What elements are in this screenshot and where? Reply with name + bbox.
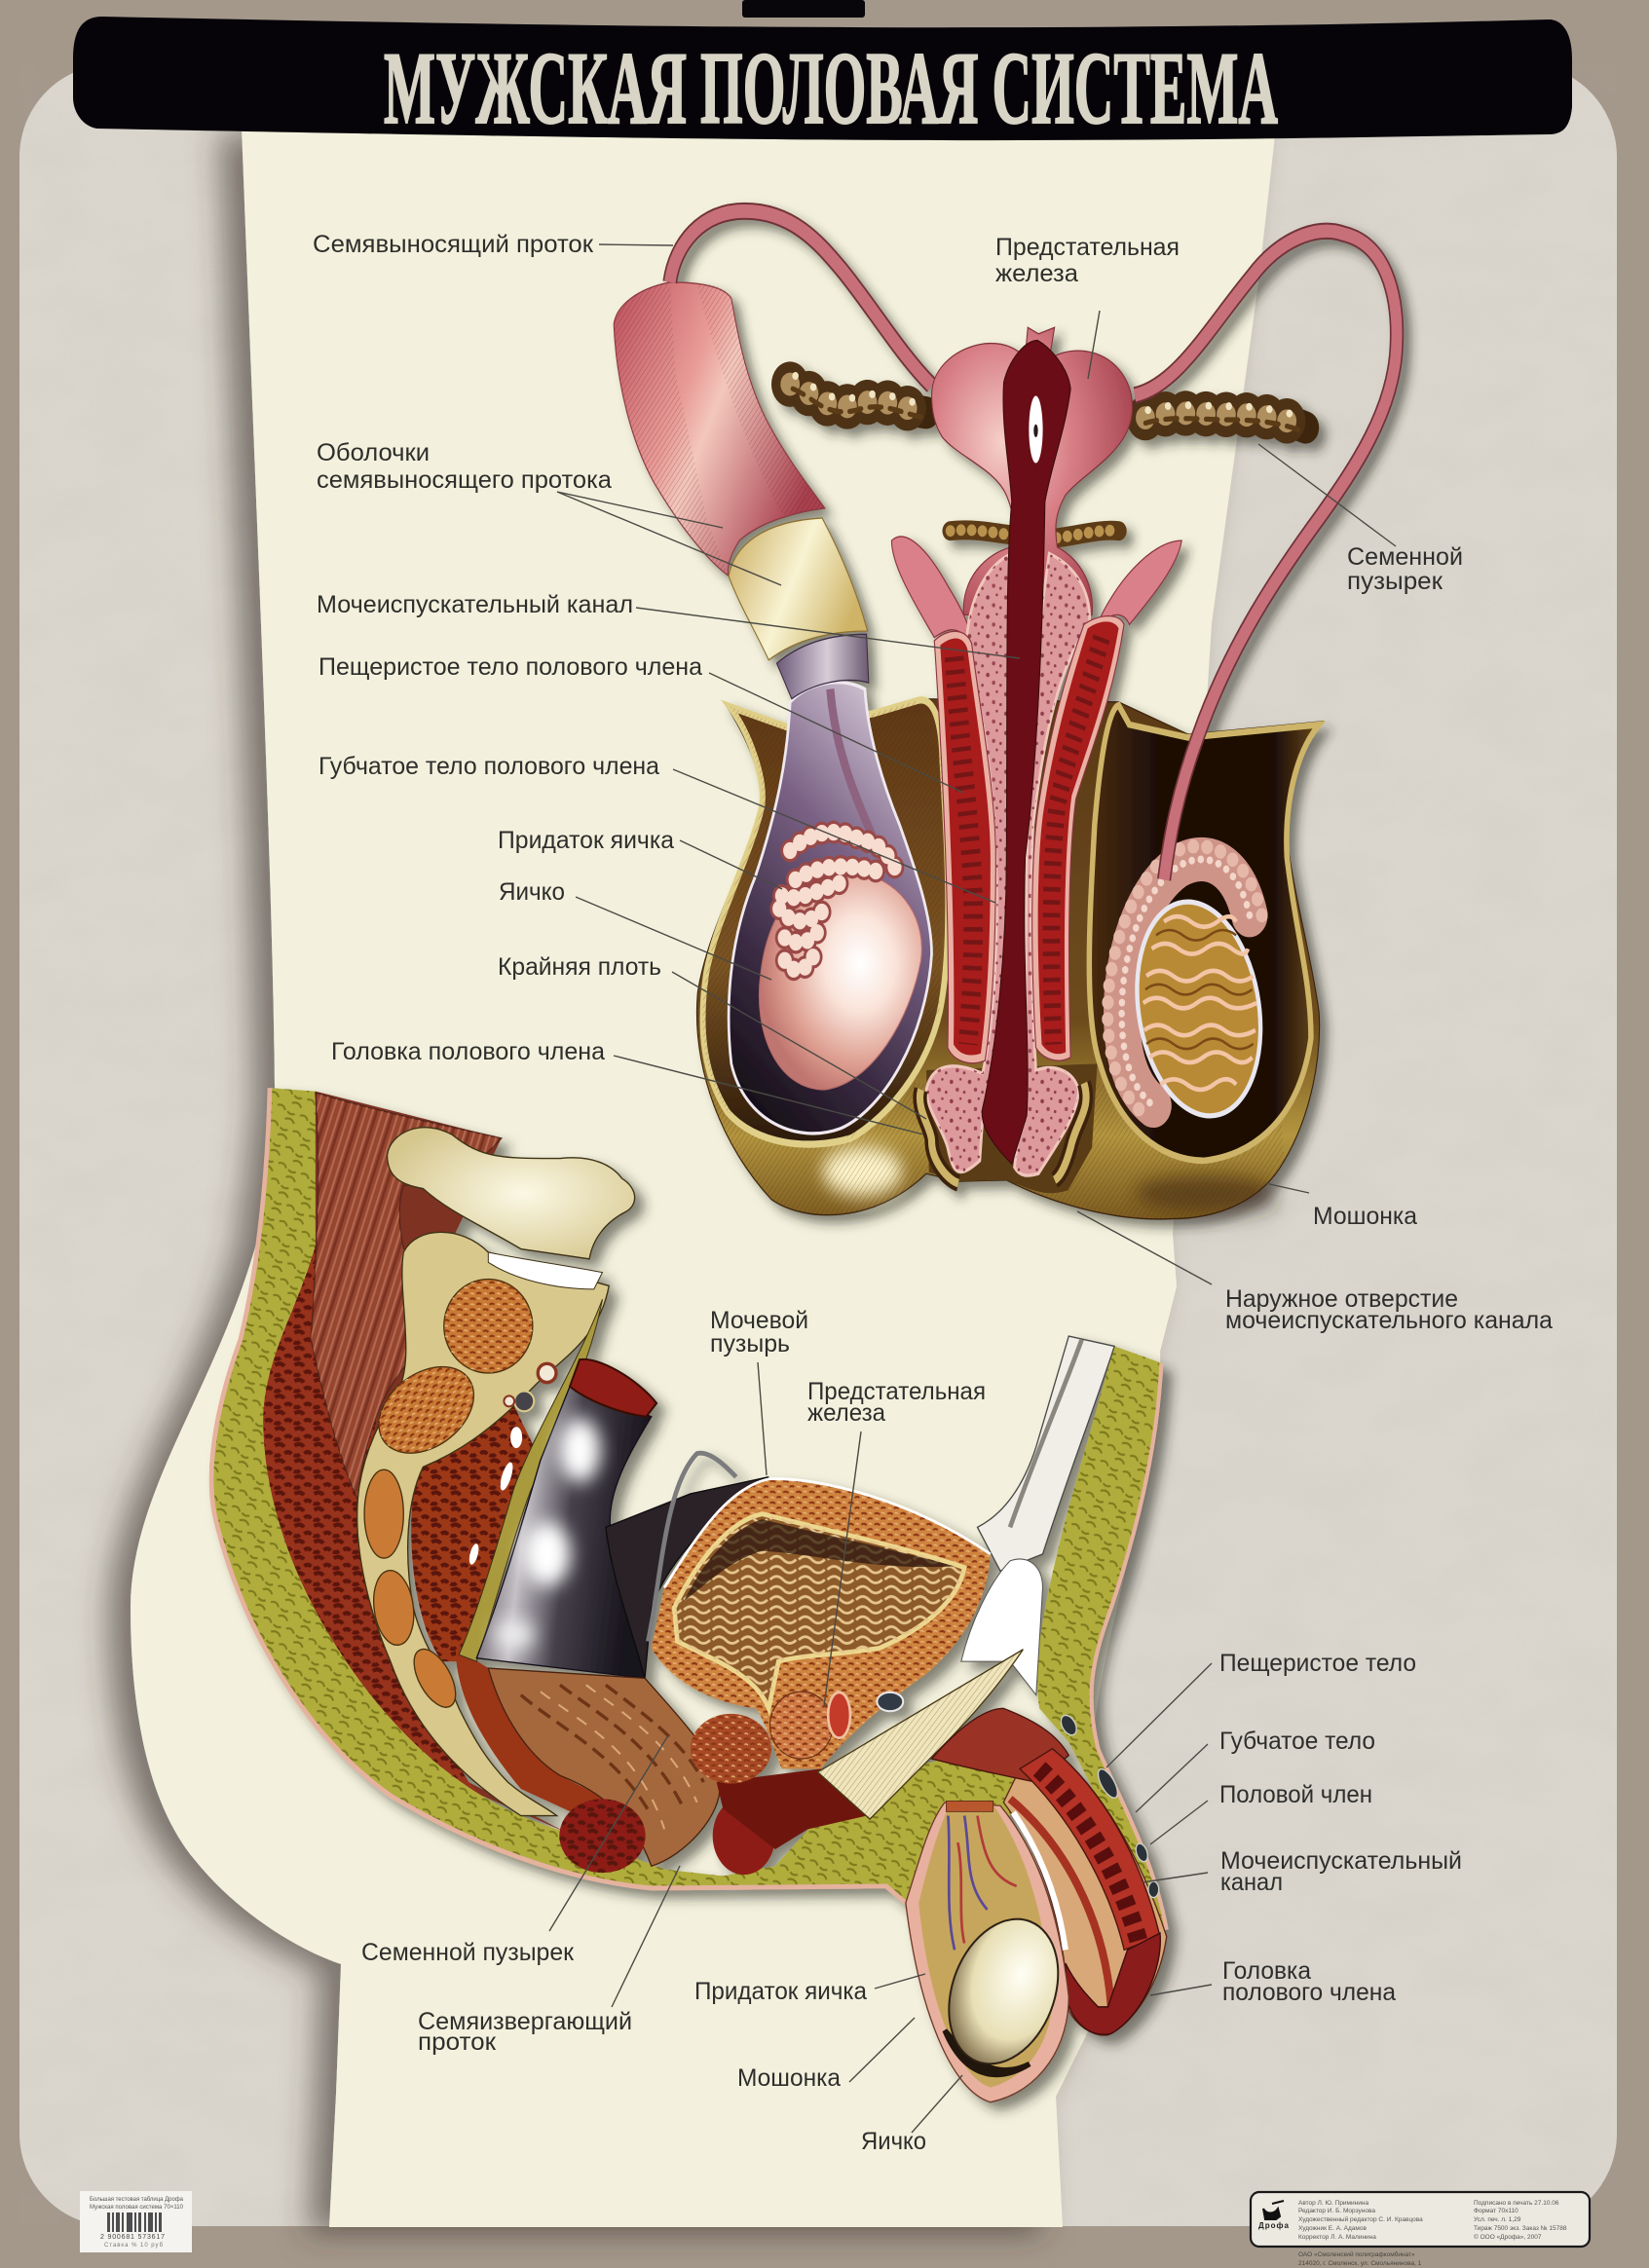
label: corpus cavernosum, bottom — [1106, 1650, 1416, 1767]
label: epididymis, bottom — [694, 1974, 925, 2005]
label: cord sheaths: Оболочки — [317, 439, 430, 466]
label: penis — [1150, 1781, 1372, 1844]
prepuce rims — [919, 1083, 1086, 1183]
label: testis, top: Яичко — [499, 878, 565, 906]
rectum upper tube — [476, 1359, 656, 1678]
deep muscle — [263, 1092, 567, 1833]
white patch — [961, 1559, 1042, 1695]
label: prostate, bottom: железа — [807, 1399, 885, 1427]
label: seminal vesicle, top: пузырек — [1347, 568, 1443, 595]
title banner — [73, 17, 1572, 145]
hanger tab — [742, 0, 865, 18]
label: corpus cavernosum, top — [319, 653, 963, 793]
glans — [1066, 1933, 1160, 2034]
barcode sticker: Мужская половая система 70×110 — [90, 2205, 184, 2211]
urethral opening — [1029, 396, 1043, 464]
label: prostate, bottom — [807, 1378, 986, 1706]
label: seminal vesicle, top — [1258, 444, 1463, 595]
imprint credits: Формат 70х110 — [1474, 2208, 1518, 2214]
right testis section — [1120, 887, 1277, 1131]
label: testis, bottom: Яичко — [861, 2128, 926, 2155]
panel: cream body silhouette — [131, 127, 1276, 2227]
pubic bone wedge — [817, 1650, 1023, 1819]
label: bladder: Мочевой — [710, 1307, 808, 1334]
label: scrotum, top — [1265, 1183, 1417, 1230]
printer address: 214020, г. Смоленск, ул. Смольянинова, 1 — [1298, 2260, 1422, 2267]
label: external urethral opening — [1077, 1211, 1553, 1334]
label: ejaculatory duct: проток — [418, 2028, 497, 2056]
label: urethra, bottom — [1143, 1847, 1462, 1896]
urethra — [982, 340, 1070, 1164]
imprint credits: Подписано в печать 27.10.06 — [1474, 2200, 1559, 2207]
printer address: ОАО «Смоленский полиграфкомбинат» — [1298, 2250, 1415, 2258]
penis: cavernous body — [1020, 1749, 1160, 1950]
imprint credits: Усл. печ. л. 1,29 — [1474, 2216, 1521, 2223]
label: urethra, bottom: канал — [1220, 1869, 1283, 1896]
label: ejaculatory duct — [418, 1866, 680, 2056]
rectum lower — [488, 1668, 720, 1866]
label: bladder: пузырь — [710, 1330, 790, 1357]
label: glans, bottom: полового члена — [1222, 1979, 1396, 2006]
vessel stump — [946, 1801, 993, 1811]
label: cord sheaths: семявыносящего протока — [317, 466, 612, 494]
corpus tips — [891, 537, 1181, 644]
label: glans, top — [331, 1038, 923, 1134]
left vas deferens — [670, 211, 932, 386]
barcode sticker: Большая тестовая таблица Дрофа — [90, 2197, 184, 2203]
vertebral bodies — [363, 1280, 533, 1714]
disc — [488, 1252, 602, 1289]
spermatic cord: fascia — [729, 518, 868, 660]
label: prepuce — [498, 953, 926, 1119]
dorsal vessels — [1058, 1713, 1159, 1898]
hip bone — [388, 1128, 635, 1259]
imprint credits: Художник Е. А. Адамов — [1298, 2225, 1368, 2232]
left epididymis — [779, 833, 897, 970]
figure: sagittal section of the pelvis — [211, 1088, 1167, 2102]
label: urethra, bottom: Мочеиспускательный — [1220, 1847, 1462, 1875]
label: testis, top — [499, 878, 771, 980]
scrotum wall — [696, 699, 1323, 1219]
label: epididymis, top — [498, 827, 782, 889]
right corpus cavernosum — [1032, 616, 1124, 1060]
label: external urethral opening: мочеиспускательного канала — [1225, 1307, 1553, 1334]
penis: base tissue — [1003, 1749, 1167, 2035]
spermatic cord: purple ring — [776, 634, 869, 699]
label: corpus spongiosum, top: Губчатое тело полового члена — [319, 753, 659, 780]
barcode sticker: 2 900681 573617 — [100, 2234, 165, 2241]
spermatic cord: muscle sheath — [614, 282, 825, 576]
label: corpus cavernosum, top: Пещеристое тело полового члена — [319, 653, 702, 681]
label: scrotum, bottom — [737, 2018, 915, 2092]
dark tube — [606, 1477, 768, 1678]
label: glans, bottom — [1150, 1957, 1396, 2006]
label: scrotum, top: Мошонка — [1313, 1203, 1417, 1230]
spongy body — [926, 553, 1090, 1175]
label: corpus cavernosum, bottom: Пещеристое тело — [1219, 1650, 1416, 1677]
prostate — [770, 1692, 903, 1759]
imprint credits: Корректор Л. А. Малинина — [1298, 2234, 1376, 2241]
left testicular sac — [729, 683, 932, 1134]
left corpus cavernosum — [934, 631, 995, 1063]
label: seminal vesicle, top: Семенной — [1347, 543, 1463, 571]
label: cord sheaths — [317, 439, 781, 585]
left testis — [759, 872, 921, 1090]
label: prepuce: Крайняя плоть — [498, 953, 661, 981]
barcode sticker — [80, 2191, 192, 2252]
printer address — [1298, 2250, 1422, 2267]
label: corpus spongiosum, bottom — [1136, 1728, 1375, 1812]
imprint credits: Редактор И. Б. Морзунова — [1298, 2208, 1375, 2214]
label: external urethral opening: Наружное отверстие — [1225, 1285, 1458, 1313]
label: prostate, top: железа — [995, 260, 1078, 287]
label: penis: Половой член — [1219, 1781, 1372, 1808]
label: urethra, top — [317, 591, 1020, 658]
bladder and prostate — [932, 327, 1133, 614]
sacrum column — [357, 1232, 609, 1816]
right cavity — [1089, 705, 1319, 1161]
barcode sticker: Ставка % 10 руб — [104, 2243, 164, 2249]
label: glans, bottom: Головка — [1222, 1957, 1311, 1985]
bladder cavity — [674, 1514, 964, 1708]
label: seminal vesicle, bottom: Семенной пузырек — [361, 1939, 575, 1966]
fat layer: back and buttock — [211, 1088, 1020, 1903]
olive strip with canal holes — [459, 1299, 602, 1661]
imprint credits — [1298, 2200, 1567, 2241]
pale ligament — [961, 1336, 1114, 1695]
abdominal wall — [1037, 1346, 1167, 1937]
white gap by scrotum — [1013, 1812, 1066, 1950]
penis: urethra and spongy layer — [1010, 1799, 1111, 2007]
tube opening — [570, 1359, 656, 1417]
barcode — [107, 2212, 162, 2232]
right epididymis — [1107, 846, 1261, 1117]
testis — [929, 1902, 1078, 2081]
imprint credits: Тираж 7500 экз. Заказ № 15788 — [1474, 2225, 1567, 2232]
label: epididymis, top: Придаток яичка — [498, 827, 674, 854]
dark red tissue — [559, 1714, 867, 1875]
label: epididymis, bottom: Придаток яичка — [694, 1978, 867, 2005]
figure: frontal section of the genital organs — [614, 211, 1397, 1219]
left cavity — [702, 700, 948, 1144]
imprint box — [1251, 2192, 1590, 2247]
label: vas deferens: Семявыносящий проток — [313, 231, 594, 258]
label: urethra, top: Мочеиспускательный канал — [317, 591, 633, 618]
imprint credits: Художественный редактор С. И. Кравцова — [1298, 2215, 1423, 2223]
penis: cavernous root — [932, 1708, 1068, 1782]
label: prostate, top: Предстательная — [995, 234, 1180, 261]
label: prostate, bottom: Предстательная — [807, 1378, 986, 1405]
publisher logo — [1258, 2201, 1290, 2230]
label: testis, bottom — [861, 2075, 962, 2155]
lower glands — [951, 530, 1118, 539]
vas inside sac — [830, 689, 873, 837]
publisher logo: Дрофа — [1258, 2221, 1290, 2230]
label: glans, top: Головка полового члена — [331, 1038, 605, 1065]
label: seminal vesicle, bottom — [361, 1735, 668, 1966]
imprint credits: Автор Л. Ю. Приминина — [1298, 2200, 1368, 2207]
vas loop — [648, 1453, 736, 1641]
label: bladder — [710, 1307, 808, 1475]
label: corpus spongiosum, bottom: Губчатое тело — [1219, 1728, 1375, 1755]
imprint credits: © ООО «Дрофа», 2007 — [1474, 2233, 1542, 2241]
label: scrotum, bottom: Мошонка — [737, 2064, 841, 2092]
bladder wall — [652, 1479, 991, 1768]
label: corpus spongiosum, top — [319, 753, 995, 903]
label: ejaculatory duct: Семяизвергающий — [418, 2008, 632, 2035]
label: prostate, top — [995, 234, 1180, 379]
scrotum — [906, 1801, 1078, 2102]
blood vessels — [948, 1816, 1017, 1950]
right vas deferens — [1135, 231, 1397, 879]
rectal wall muscle — [411, 1406, 613, 1816]
seminal vesicles — [790, 376, 1305, 432]
back muscle — [311, 1093, 502, 1501]
